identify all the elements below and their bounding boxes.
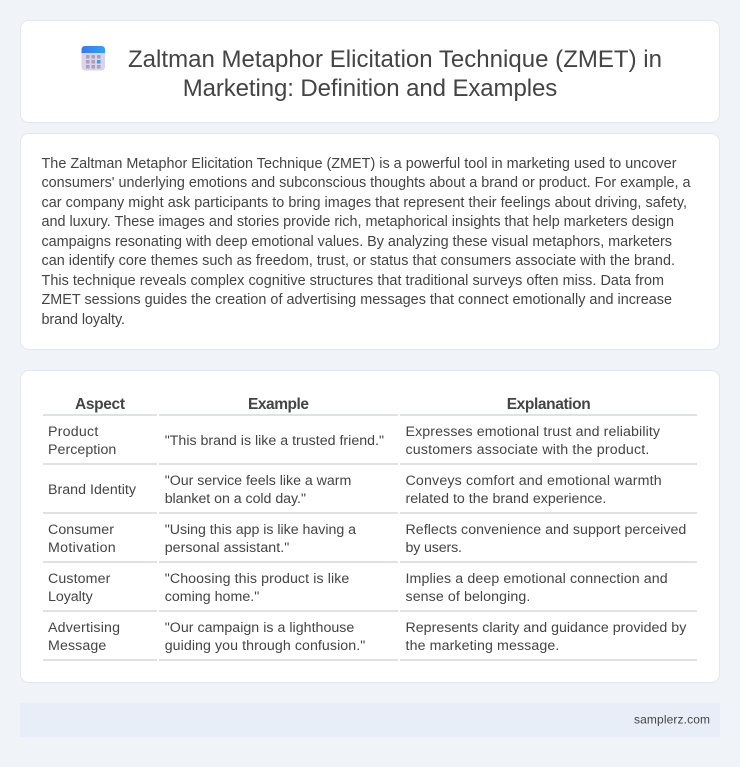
row: brand identity: Conveys comfort and emotional warmth bbox=[406, 473, 662, 489]
row: customer loyalty bbox=[48, 571, 668, 605]
footer text: samplerz.com bbox=[634, 712, 710, 726]
row: product perception: Perception bbox=[48, 442, 116, 458]
panel: metaphor table bbox=[20, 370, 720, 682]
table header: Explanation bbox=[507, 396, 591, 413]
icon: calendar bbox=[82, 46, 105, 70]
title: Zaltman Metaphor Elicitation Technique (ZMET) in bbox=[128, 46, 662, 73]
row: advertising message: "Our campaign is a lighthouse bbox=[165, 620, 354, 636]
row: brand identity bbox=[48, 473, 662, 507]
row: product perception: Product bbox=[48, 424, 98, 440]
row: advertising message: Advertising bbox=[48, 620, 120, 636]
row: advertising message: the marketing message. bbox=[406, 638, 559, 654]
text block: description: brand loyalty. bbox=[42, 312, 125, 328]
row: customer loyalty: Loyalty bbox=[48, 589, 94, 605]
row: advertising message: guiding you through confusion." bbox=[165, 638, 365, 654]
text block: description: and luxury. These images and stories provide rich, metaphorical insights that help marketers design bbox=[42, 214, 674, 230]
row: advertising message: Message bbox=[48, 638, 106, 654]
text block: description: can identify core themes such as freedom, trust, or status that consumers associate with the brand. bbox=[42, 253, 675, 269]
row: consumer motivation: "Using this app is like having a bbox=[165, 522, 356, 538]
row: customer loyalty: Customer bbox=[48, 571, 111, 587]
row: brand identity: related to the brand experience. bbox=[406, 491, 606, 507]
row: consumer motivation: Reflects convenience and support perceived bbox=[406, 522, 686, 538]
table header: Aspect bbox=[75, 396, 125, 413]
text block: description: campaigns resonating with deep emotional values. By analyzing these visual metaphors, marketers bbox=[42, 234, 672, 250]
row: brand identity: Brand Identity bbox=[48, 482, 137, 498]
row: product perception: "This brand is like a trusted friend." bbox=[165, 433, 384, 449]
row: consumer motivation bbox=[48, 522, 686, 556]
row: customer loyalty: coming home." bbox=[165, 589, 259, 605]
row: product perception bbox=[48, 424, 661, 458]
panel: title card bbox=[20, 20, 720, 122]
row: customer loyalty: "Choosing this product is like bbox=[165, 571, 349, 587]
row: consumer motivation: personal assistant." bbox=[165, 540, 289, 556]
title: Marketing: Definition and Examples bbox=[183, 75, 557, 102]
row: consumer motivation: Motivation bbox=[48, 540, 116, 556]
row: consumer motivation: by users. bbox=[406, 540, 462, 556]
row: customer loyalty: Implies a deep emotional connection and bbox=[406, 571, 668, 587]
row: product perception: customers associate with the product. bbox=[406, 442, 649, 458]
row: brand identity: "Our service feels like a warm bbox=[165, 473, 351, 489]
text block: description bbox=[42, 156, 690, 328]
title bbox=[128, 46, 662, 102]
panel: description bbox=[20, 134, 720, 350]
row: product perception: Expresses emotional trust and reliability bbox=[406, 424, 661, 440]
row: consumer motivation: Consumer bbox=[48, 522, 114, 538]
text block: description: car company might ask participants to bring images that represent their feelings about driving, safety, bbox=[42, 195, 687, 211]
text block: description: This technique reveals complex cognitive structures that traditional surveys often miss. Data from bbox=[42, 273, 664, 289]
row: brand identity: blanket on a cold day." bbox=[165, 491, 306, 507]
row: customer loyalty: sense of belonging. bbox=[406, 589, 530, 605]
table header: Example bbox=[248, 396, 309, 413]
table header bbox=[75, 396, 591, 413]
text block: description: The Zaltman Metaphor Elicitation Technique (ZMET) is a powerful tool in marketing used to uncover bbox=[42, 156, 677, 172]
footer bar bbox=[20, 703, 720, 737]
text block: description: ZMET sessions guides the creation of advertising messages that connect emotionally and increase bbox=[42, 292, 672, 308]
row: advertising message: Represents clarity and guidance provided by bbox=[406, 620, 687, 636]
text block: description: consumers' underlying emotions and subconscious thoughts about a brand or product. For example, a bbox=[42, 175, 690, 191]
row: advertising message bbox=[48, 620, 687, 654]
